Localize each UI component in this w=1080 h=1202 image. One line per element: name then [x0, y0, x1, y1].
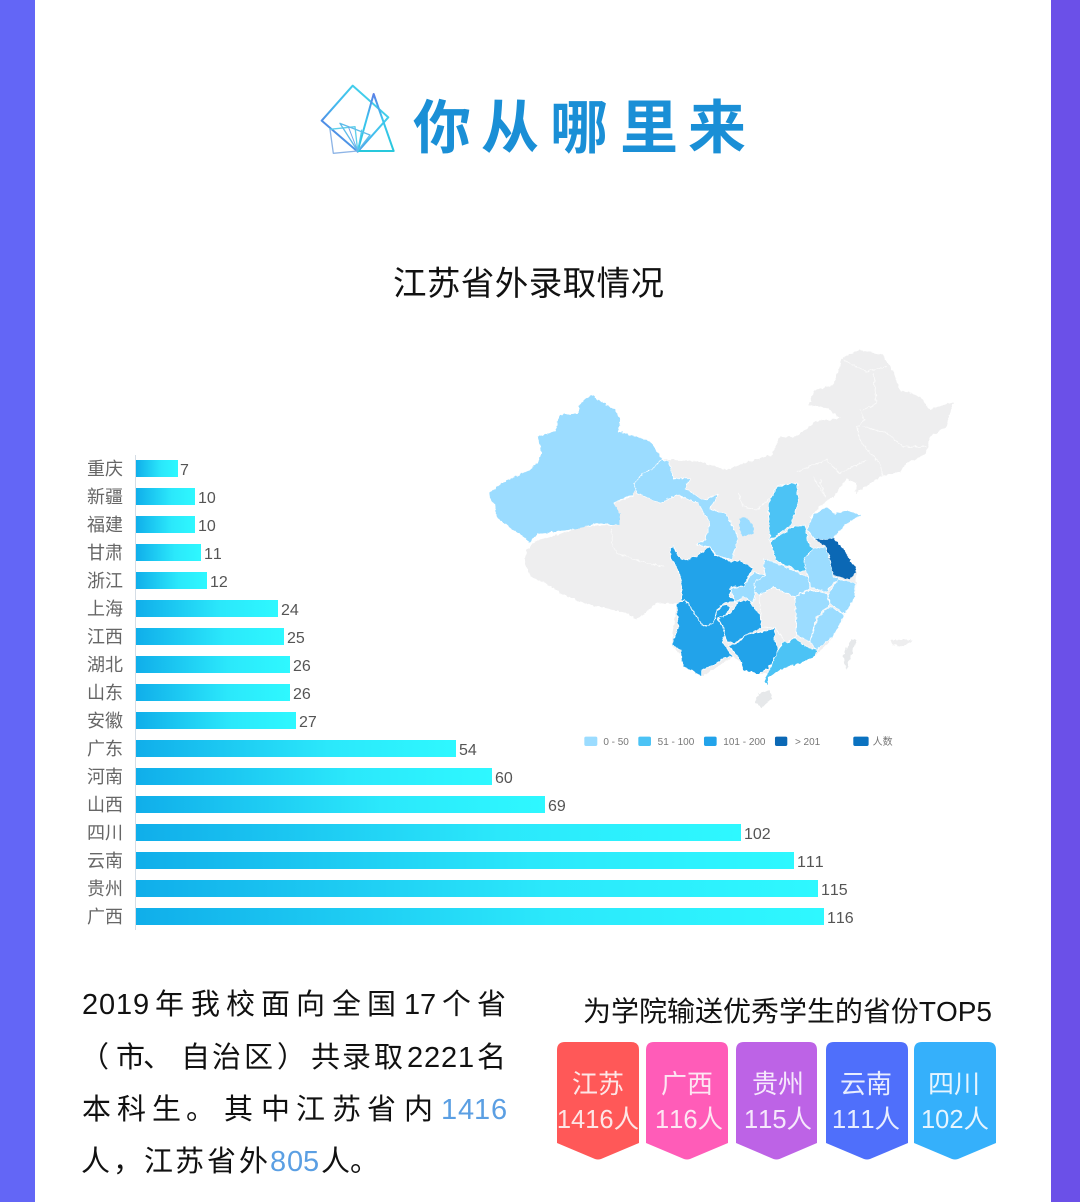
map: Zhejiang — [828, 578, 855, 615]
map: Shandong — [807, 507, 862, 540]
map: Sichuan — [670, 547, 753, 627]
map: Yunnan — [672, 600, 733, 677]
left side band — [0, 0, 35, 1202]
map: eastern and southern provinces — [670, 483, 913, 708]
map: Xinjiang — [489, 395, 662, 543]
map: Gansu — [634, 459, 738, 560]
summary text block: （市、自治区）共录取2221名 — [80, 1041, 506, 1074]
bar: 广东 — [87, 739, 477, 759]
bar: 湖北: 湖北 — [87, 655, 123, 675]
map: Chongqing — [730, 572, 765, 603]
map: Fujian — [810, 607, 845, 650]
top5 badge: 四川 — [914, 1042, 996, 1160]
bar: 重庆: 重庆 — [87, 459, 123, 479]
map: Shanxi — [768, 483, 798, 540]
top5 badge: 江苏: 1416人 — [557, 1106, 639, 1134]
legend item: over 201 — [775, 737, 821, 748]
map: Ningxia area — [740, 517, 753, 537]
bar: 江西: 江西 — [87, 627, 123, 647]
bar: 四川 — [87, 823, 771, 843]
icon: geometric logo — [322, 86, 394, 153]
map: Anhui — [803, 547, 838, 592]
bar: 山西 — [87, 795, 566, 815]
bar: 河南 — [87, 767, 513, 787]
map: Jiangxi — [795, 590, 830, 642]
bar: 贵州 — [87, 879, 848, 899]
bar: 山东: 26 — [293, 686, 311, 703]
map: Guangdong — [764, 637, 817, 687]
summary text block — [80, 988, 507, 1178]
top5 badge: 广西 — [646, 1042, 728, 1160]
bar: 浙江 — [87, 571, 228, 591]
map: grey area province lines — [612, 360, 927, 567]
top5 badge: 云南 — [826, 1042, 908, 1160]
bar: 云南 — [87, 851, 824, 871]
legend item: people: 人数 — [873, 735, 893, 748]
legend item: 0-50: 0 - 50 — [603, 737, 629, 748]
map of China — [489, 350, 953, 708]
top5 badge: 广西: 广西 — [661, 1069, 713, 1099]
map: Hainan — [755, 690, 772, 708]
bar: 山东 — [87, 683, 311, 703]
bar: 湖北: 26 — [293, 658, 311, 675]
bar: 四川: 四川 — [87, 823, 123, 843]
summary text block: 本科生。其中江苏省内 1416 — [82, 1093, 507, 1126]
bar chart — [87, 455, 854, 930]
bar: 贵州: 贵州 — [87, 879, 123, 899]
top5 badge: 江苏: 江苏 — [572, 1069, 624, 1099]
bar: 江西: 25 — [287, 630, 305, 647]
map: Henan — [770, 525, 813, 572]
bar: 福建: 福建 — [87, 515, 123, 535]
top5 badge: 广西: 116人 — [655, 1106, 723, 1134]
legend item: 51-100: 51 - 100 — [658, 737, 695, 748]
bar: 山东: 山东 — [87, 683, 123, 703]
top5 badge: 云南: 111人 — [832, 1106, 900, 1134]
map: Guizhou — [718, 600, 762, 643]
section heading: 江苏省外录取情况 — [393, 266, 664, 303]
legend item: 51-100 — [638, 737, 695, 748]
bar: 新疆 — [87, 487, 216, 507]
bar: 安徽: 安徽 — [87, 711, 123, 731]
bar: 河南: 河南 — [87, 767, 123, 787]
top5 badge: 四川: 102人 — [921, 1106, 989, 1134]
map: Jiangsu — [815, 538, 857, 579]
bar: 广西: 广西 — [87, 907, 123, 927]
bar: 新疆: 10 — [198, 490, 216, 507]
bar: 四川: 102 — [744, 826, 771, 843]
bar: 云南: 111 — [797, 854, 824, 871]
bar: 安徽 — [87, 711, 317, 731]
bar: 重庆: 7 — [180, 462, 189, 479]
map: Taiwan — [843, 638, 856, 670]
bar: 河南: 60 — [495, 770, 513, 787]
bar: 广西 — [87, 907, 854, 927]
map legend — [584, 735, 893, 748]
legend item: people — [853, 735, 893, 748]
bar: 山西: 69 — [548, 798, 566, 815]
bar: 甘肃: 甘肃 — [87, 543, 123, 563]
map: Guangxi — [728, 628, 780, 674]
bar: 上海: 上海 — [87, 599, 123, 619]
bar: 上海: 24 — [281, 602, 299, 619]
bar: 新疆: 新疆 — [87, 487, 123, 507]
bar: 福建: 10 — [198, 518, 216, 535]
bar: 浙江: 12 — [210, 574, 228, 591]
bar: 甘肃: 11 — [204, 546, 222, 563]
bar: 福建 — [87, 515, 216, 535]
map: Hunan — [759, 587, 797, 643]
bar: 上海 — [87, 599, 299, 619]
legend item: 0-50 — [584, 737, 629, 748]
bar: 贵州: 115 — [821, 882, 848, 899]
bar: 甘肃 — [87, 543, 222, 563]
legend item: over 201: > 201 — [795, 737, 821, 748]
bar: 广东: 广东 — [87, 739, 123, 759]
top5 badge: 江苏 — [557, 1042, 639, 1160]
bar: 山西: 山西 — [87, 795, 123, 815]
top5 badge: 贵州: 115人 — [744, 1106, 812, 1134]
top5 heading: 为学院输送优秀学生的省份TOP5 — [583, 996, 992, 1027]
legend item: 101-200 — [704, 737, 766, 748]
map: South China Sea inset — [890, 640, 913, 647]
bar: 江西 — [87, 627, 305, 647]
title: 你从哪里来 — [413, 96, 746, 161]
bar: 湖北 — [87, 655, 311, 675]
top5 badge: 贵州 — [736, 1042, 817, 1160]
summary text block: 2019年我校面向全国17个省 — [82, 988, 506, 1021]
top5 badge: 云南: 云南 — [840, 1069, 892, 1099]
bar: 广东: 54 — [459, 742, 477, 759]
bar: 重庆 — [87, 459, 189, 479]
map: grey base regions — [525, 350, 953, 677]
bar: 云南: 云南 — [87, 851, 123, 871]
top5 badge: 四川: 四川 — [928, 1069, 980, 1099]
legend item: 101-200: 101 - 200 — [723, 737, 766, 748]
map: Hubei — [754, 558, 810, 597]
bar: 浙江: 浙江 — [87, 571, 123, 591]
top5 badge: 贵州: 贵州 — [752, 1069, 804, 1099]
bar: 广西: 116 — [827, 910, 854, 927]
right side band — [1051, 0, 1080, 1202]
summary text block: 人，江苏省外805人。 — [81, 1145, 379, 1178]
bar: 安徽: 27 — [299, 714, 317, 731]
